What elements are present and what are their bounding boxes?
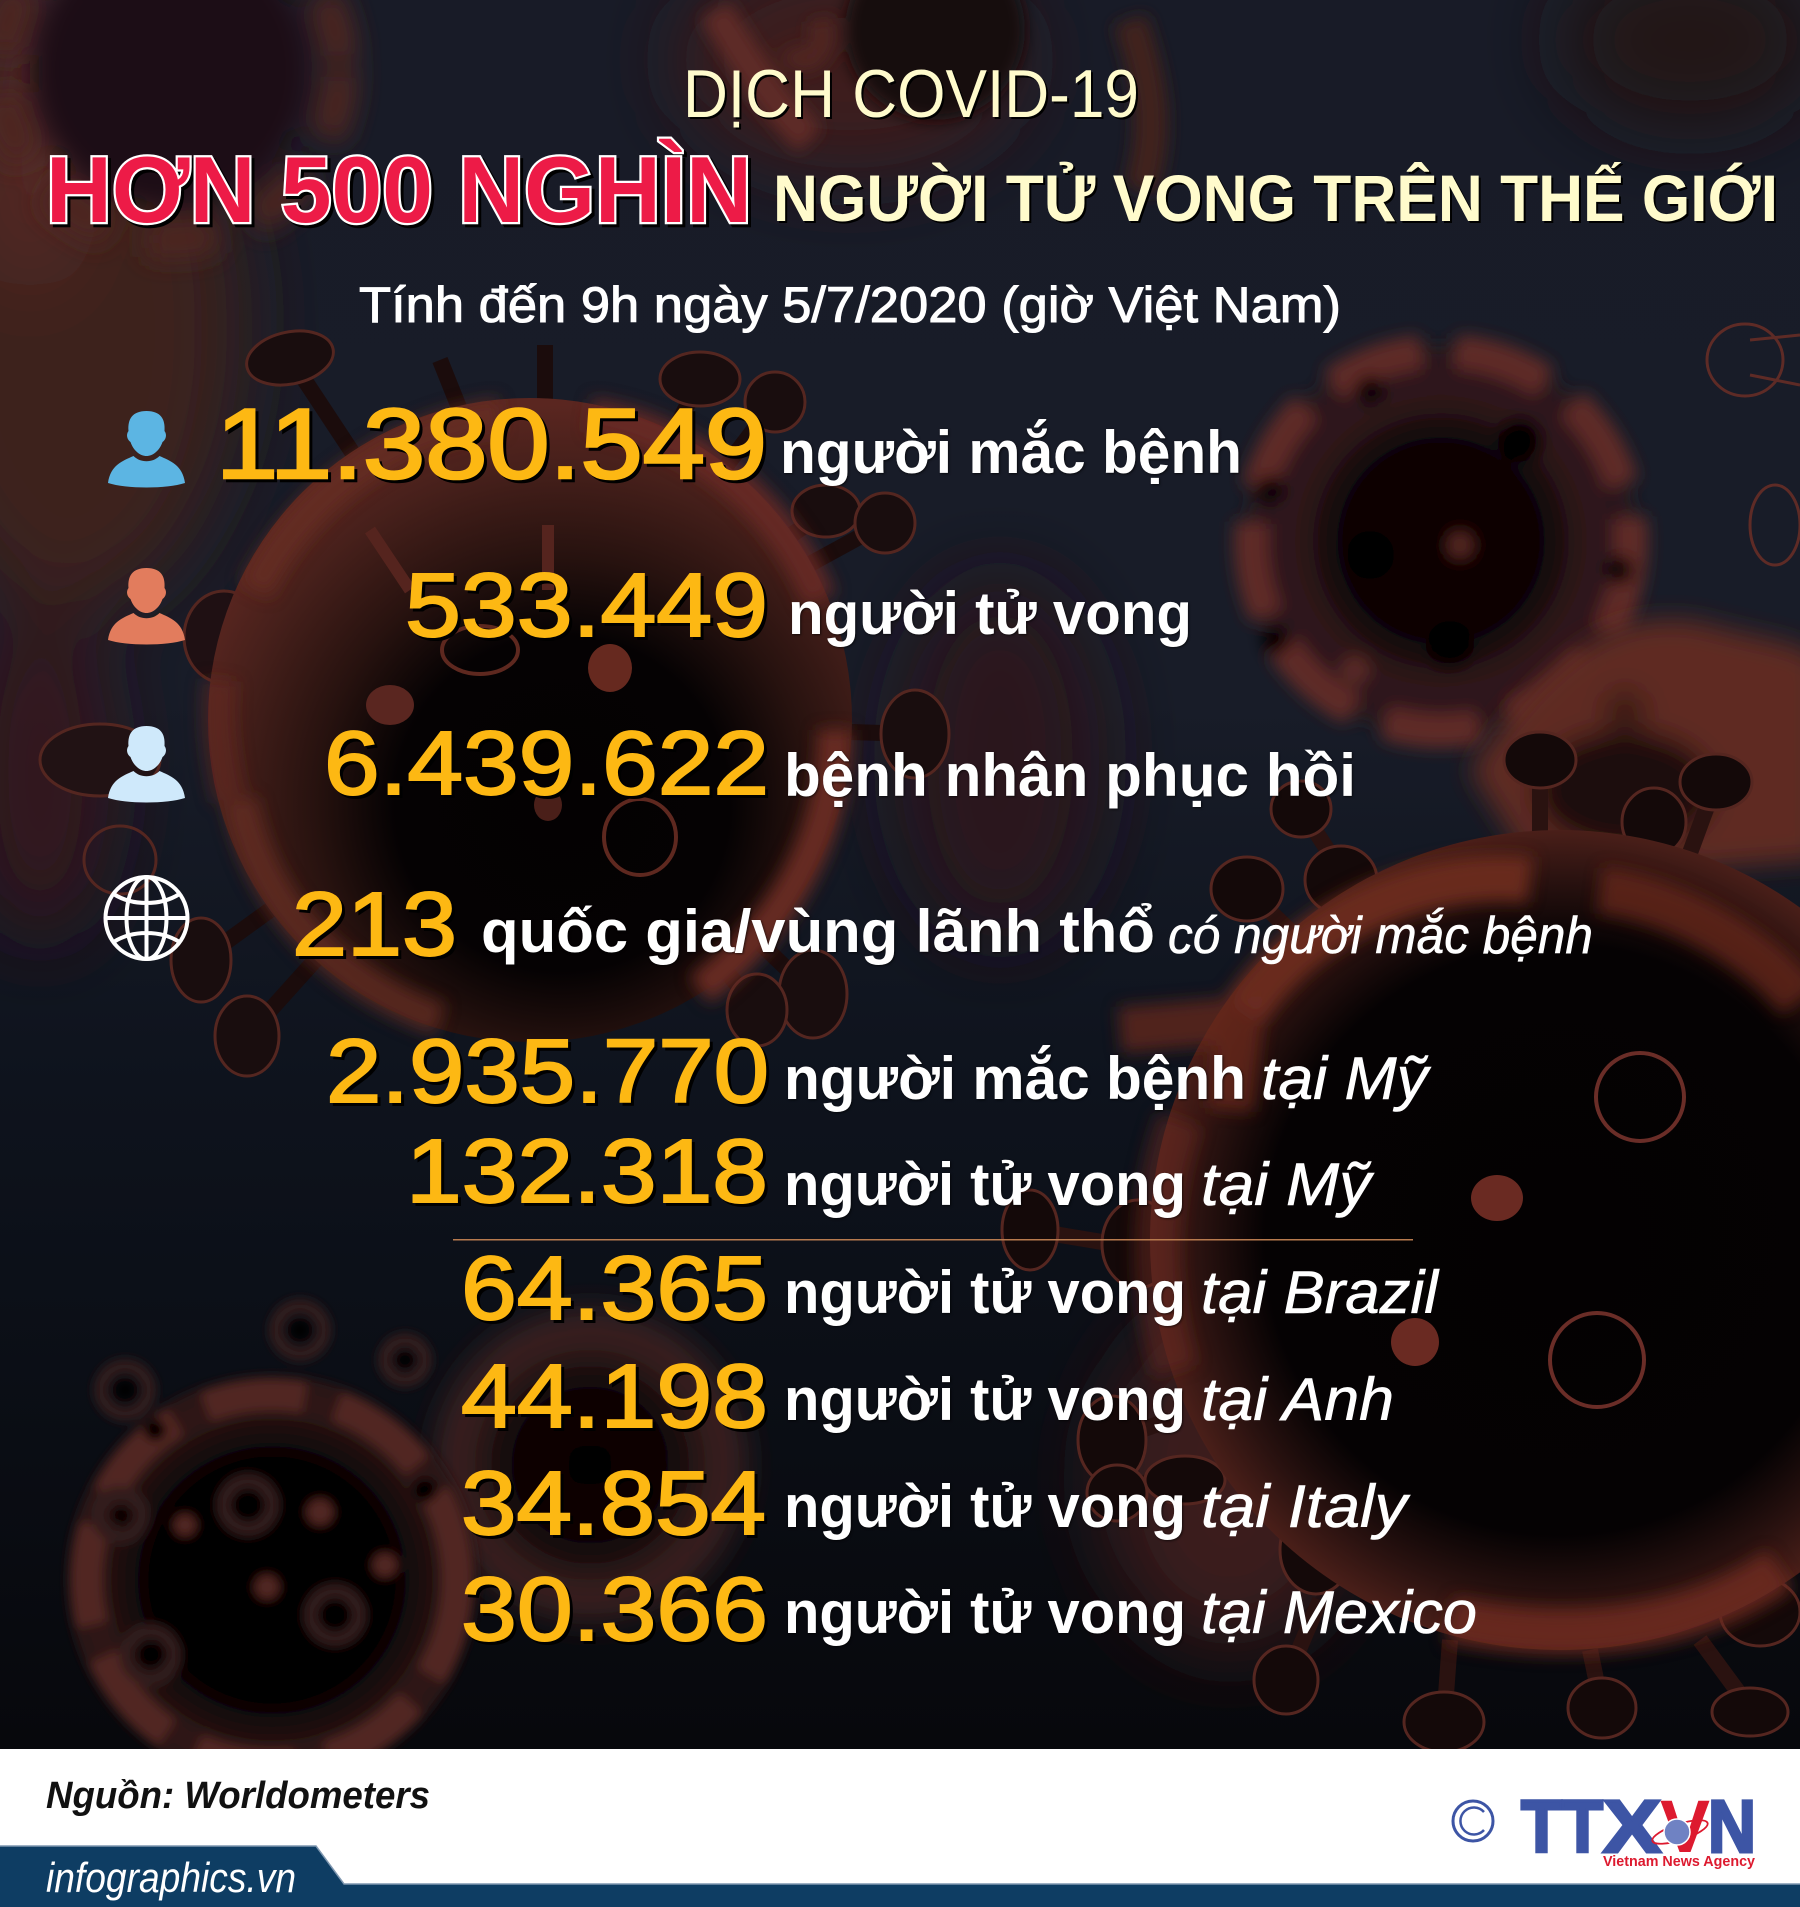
virus: right middle blurred <box>1470 620 1800 880</box>
row: us cases: 2.935.770 <box>326 1022 769 1122</box>
row: deaths: 533.449 <box>405 556 768 656</box>
row: uk deaths <box>461 1347 1394 1447</box>
headline: hơn 500 nghìn: HƠN 500 NGHÌN <box>46 137 752 242</box>
virus: top centre blurred <box>715 0 1151 190</box>
row: uk deaths: tại Anh <box>1201 1366 1394 1433</box>
row: mexico deaths: 30.366 <box>461 1560 768 1660</box>
virus: lower left blurred <box>67 1306 477 1785</box>
icon: globe <box>106 877 188 959</box>
footer bar with tab <box>0 1846 1800 1907</box>
row: mexico deaths: người tử vong <box>784 1579 1186 1646</box>
row: brazil deaths <box>461 1239 1440 1339</box>
spikes: main virus <box>40 323 949 1076</box>
spikes: lower right virus <box>1002 732 1800 1752</box>
row: brazil deaths: người tử vong <box>784 1259 1186 1326</box>
row: deaths: người tử vong <box>788 580 1192 647</box>
virus: large lower right <box>1002 732 1800 1752</box>
icon: copyright <box>1453 1801 1493 1841</box>
row: uk deaths: 44.198 <box>461 1347 768 1447</box>
row: recovered <box>324 714 1356 814</box>
icon: pale blue person <box>108 726 185 802</box>
row: us deaths: người tử vong <box>784 1151 1186 1218</box>
footer panel <box>0 1749 1800 1907</box>
logo: ttxvn: Vietnam News Agency <box>1603 1853 1756 1870</box>
row: italy deaths: người tử vong <box>784 1473 1186 1540</box>
row: countries: quốc gia/vùng lãnh thổ <box>481 898 1155 965</box>
virus: upper right blurred <box>1246 346 1636 736</box>
row: us cases: tại Mỹ <box>1261 1045 1432 1112</box>
row: countries: 213 <box>292 875 457 975</box>
row: us deaths: 132.318 <box>406 1122 768 1222</box>
virus: glow behind lower middle <box>420 1295 760 1635</box>
virus: top right spike outlines <box>1707 324 1800 565</box>
row: total cases: 11.380.549 <box>216 388 767 499</box>
row: recovered: bệnh nhân phục hồi <box>784 742 1356 809</box>
icon: orange person <box>108 568 185 644</box>
virus: main large centre-left <box>40 323 949 1076</box>
row: deaths <box>405 556 1192 656</box>
row: countries: có người mắc bệnh <box>1168 907 1593 965</box>
logo: ttxvn: N <box>1708 1785 1756 1868</box>
row: mexico deaths: tại Mexico <box>1201 1579 1477 1646</box>
source text: Nguồn: Worldometers <box>46 1775 430 1817</box>
row: us deaths <box>406 1122 1375 1222</box>
logo: ttxvn: TT <box>1521 1785 1603 1868</box>
row: total cases: người mắc bệnh <box>780 419 1242 486</box>
row: brazil deaths: tại Brazil <box>1201 1259 1440 1326</box>
icon: blue person <box>108 411 185 488</box>
row: uk deaths: người tử vong <box>784 1366 1186 1433</box>
subtitle: date: Tính đến 9h ngày 5/7/2020 (giờ Việt Nam) <box>359 277 1341 333</box>
title: dịch covid-19: DỊCH COVID-19 <box>683 56 1139 132</box>
row: us cases <box>326 1022 1432 1122</box>
row: countries <box>292 875 1593 975</box>
row: us deaths: tại Mỹ <box>1201 1151 1375 1218</box>
row: total cases <box>216 388 1242 499</box>
row: mexico deaths <box>461 1560 1477 1660</box>
virus: top left blurred <box>0 0 340 240</box>
row: italy deaths <box>461 1454 1411 1554</box>
row: italy deaths: tại Italy <box>1201 1473 1411 1540</box>
logo: ttxvn: V <box>1660 1785 1710 1868</box>
row: italy deaths: 34.854 <box>461 1454 766 1554</box>
row: recovered: 6.439.622 <box>324 714 769 814</box>
row: us cases: người mắc bệnh <box>784 1045 1246 1112</box>
row: brazil deaths: 64.365 <box>461 1239 768 1339</box>
site label: infographics.vn <box>46 1854 296 1901</box>
logo: ttxvn: X <box>1603 1785 1661 1868</box>
logo: ttxvn <box>1521 1785 1756 1870</box>
